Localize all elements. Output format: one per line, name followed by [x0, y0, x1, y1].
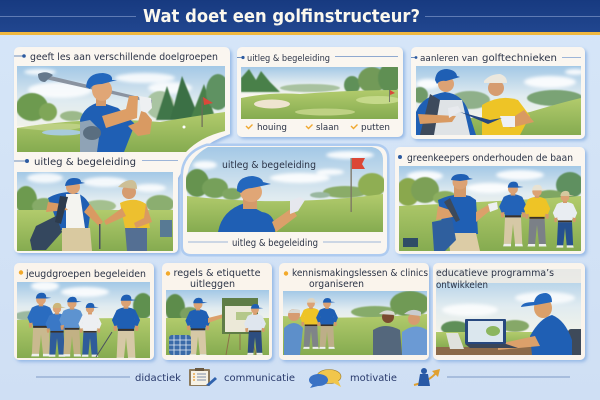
header banner: [0, 0, 600, 35]
label: motivatie: motivatie: [350, 373, 397, 384]
panel: educatieve programma's ontwikkelen: [433, 263, 585, 360]
illustration: instructeur achter laptop: [436, 269, 581, 355]
heading: regels: uitleggen: [190, 279, 235, 290]
title: Wat doet een golfinstructeur?: [143, 6, 420, 27]
illustration: instructeur met golfclub: [16, 66, 230, 152]
panel: greenkeepers onderhouden de baan: [395, 147, 585, 254]
heading: uitleg: [237, 54, 398, 64]
heading: uitleg en begeleiding: [14, 157, 178, 168]
label: communicatie: communicatie: [224, 373, 295, 384]
heading: uitleg overlay: uitleg & begeleiding: [222, 160, 316, 171]
illustration: jeugdgroep: [17, 282, 150, 358]
checklist: houding: houing: [257, 123, 287, 133]
illustration: instructeur en groep op de baan: [399, 166, 581, 251]
heading: greenkeepers: greenkeepers onderhouden de baan: [407, 153, 573, 164]
heading: jeugdgroepen: jeugdgroepen begeleiden: [25, 269, 146, 280]
checklist: putten: putten: [361, 123, 390, 133]
panel: centrale uitleg en begeleiding: [183, 146, 387, 254]
heading: aanleren: aanleren van: [420, 54, 478, 64]
heading: aanleren: [411, 53, 581, 64]
icon: spraakwolken: [309, 370, 341, 388]
icon: figuur met stijgende pijl: [414, 368, 440, 386]
heading: educatieve programma's: [436, 268, 554, 291]
panel: kennismakingslessen en clinics organiseren: [279, 263, 430, 360]
panel: regels en etiquette uitleggen: [162, 263, 272, 360]
heading: educatieve programma's: educatieve programma’s: [436, 268, 554, 279]
label: didactiek: didactiek: [135, 373, 182, 384]
heading: kennismaking: organiseren: [309, 279, 364, 290]
heading: educatieve programma's: ontwikkelen: [436, 280, 488, 291]
heading: kennismaking: kennismakingslessen & clinics: [292, 268, 428, 279]
heading: uitleg en begeleiding: uitleg & begeleiding: [34, 157, 136, 168]
caption: uitleg: uitleg & begeleiding: [232, 238, 318, 249]
illustration: instructeur wijst naar vlag: [186, 147, 384, 232]
heading: regels: regels & etiquette: [174, 268, 261, 279]
heading: uitleg: uitleg & begeleiding: [247, 54, 330, 64]
illustration: instructeur en leerling: [17, 172, 173, 251]
heading: geeft les: geeft les aan verschillende doelgroepen: [30, 52, 218, 63]
heading: kennismaking: [284, 268, 428, 290]
heading: aanleren: golftechnieken: [482, 53, 557, 64]
panel: aanleren van golftechnieken: [411, 47, 585, 139]
heading: regels: [166, 268, 261, 290]
panel: jeugdgroepen begeleiden: [14, 263, 154, 360]
checklist: slaan: [306, 123, 339, 133]
illustration: clinic op de baan: [283, 291, 427, 355]
illustration: uitleg bij bord: [166, 290, 269, 355]
illustration: fairway met bunker: [241, 67, 398, 119]
icon: klembord: [189, 368, 217, 386]
illustration: twee golfers met club: [416, 66, 581, 135]
checklist: slaan: slaan: [316, 123, 339, 133]
panel: geeft les aan verschillende doelgroepen: [14, 47, 230, 253]
panel: uitleg en begeleiding houding slaan putten: [237, 47, 403, 137]
footer: vaardigheden: [36, 368, 570, 388]
